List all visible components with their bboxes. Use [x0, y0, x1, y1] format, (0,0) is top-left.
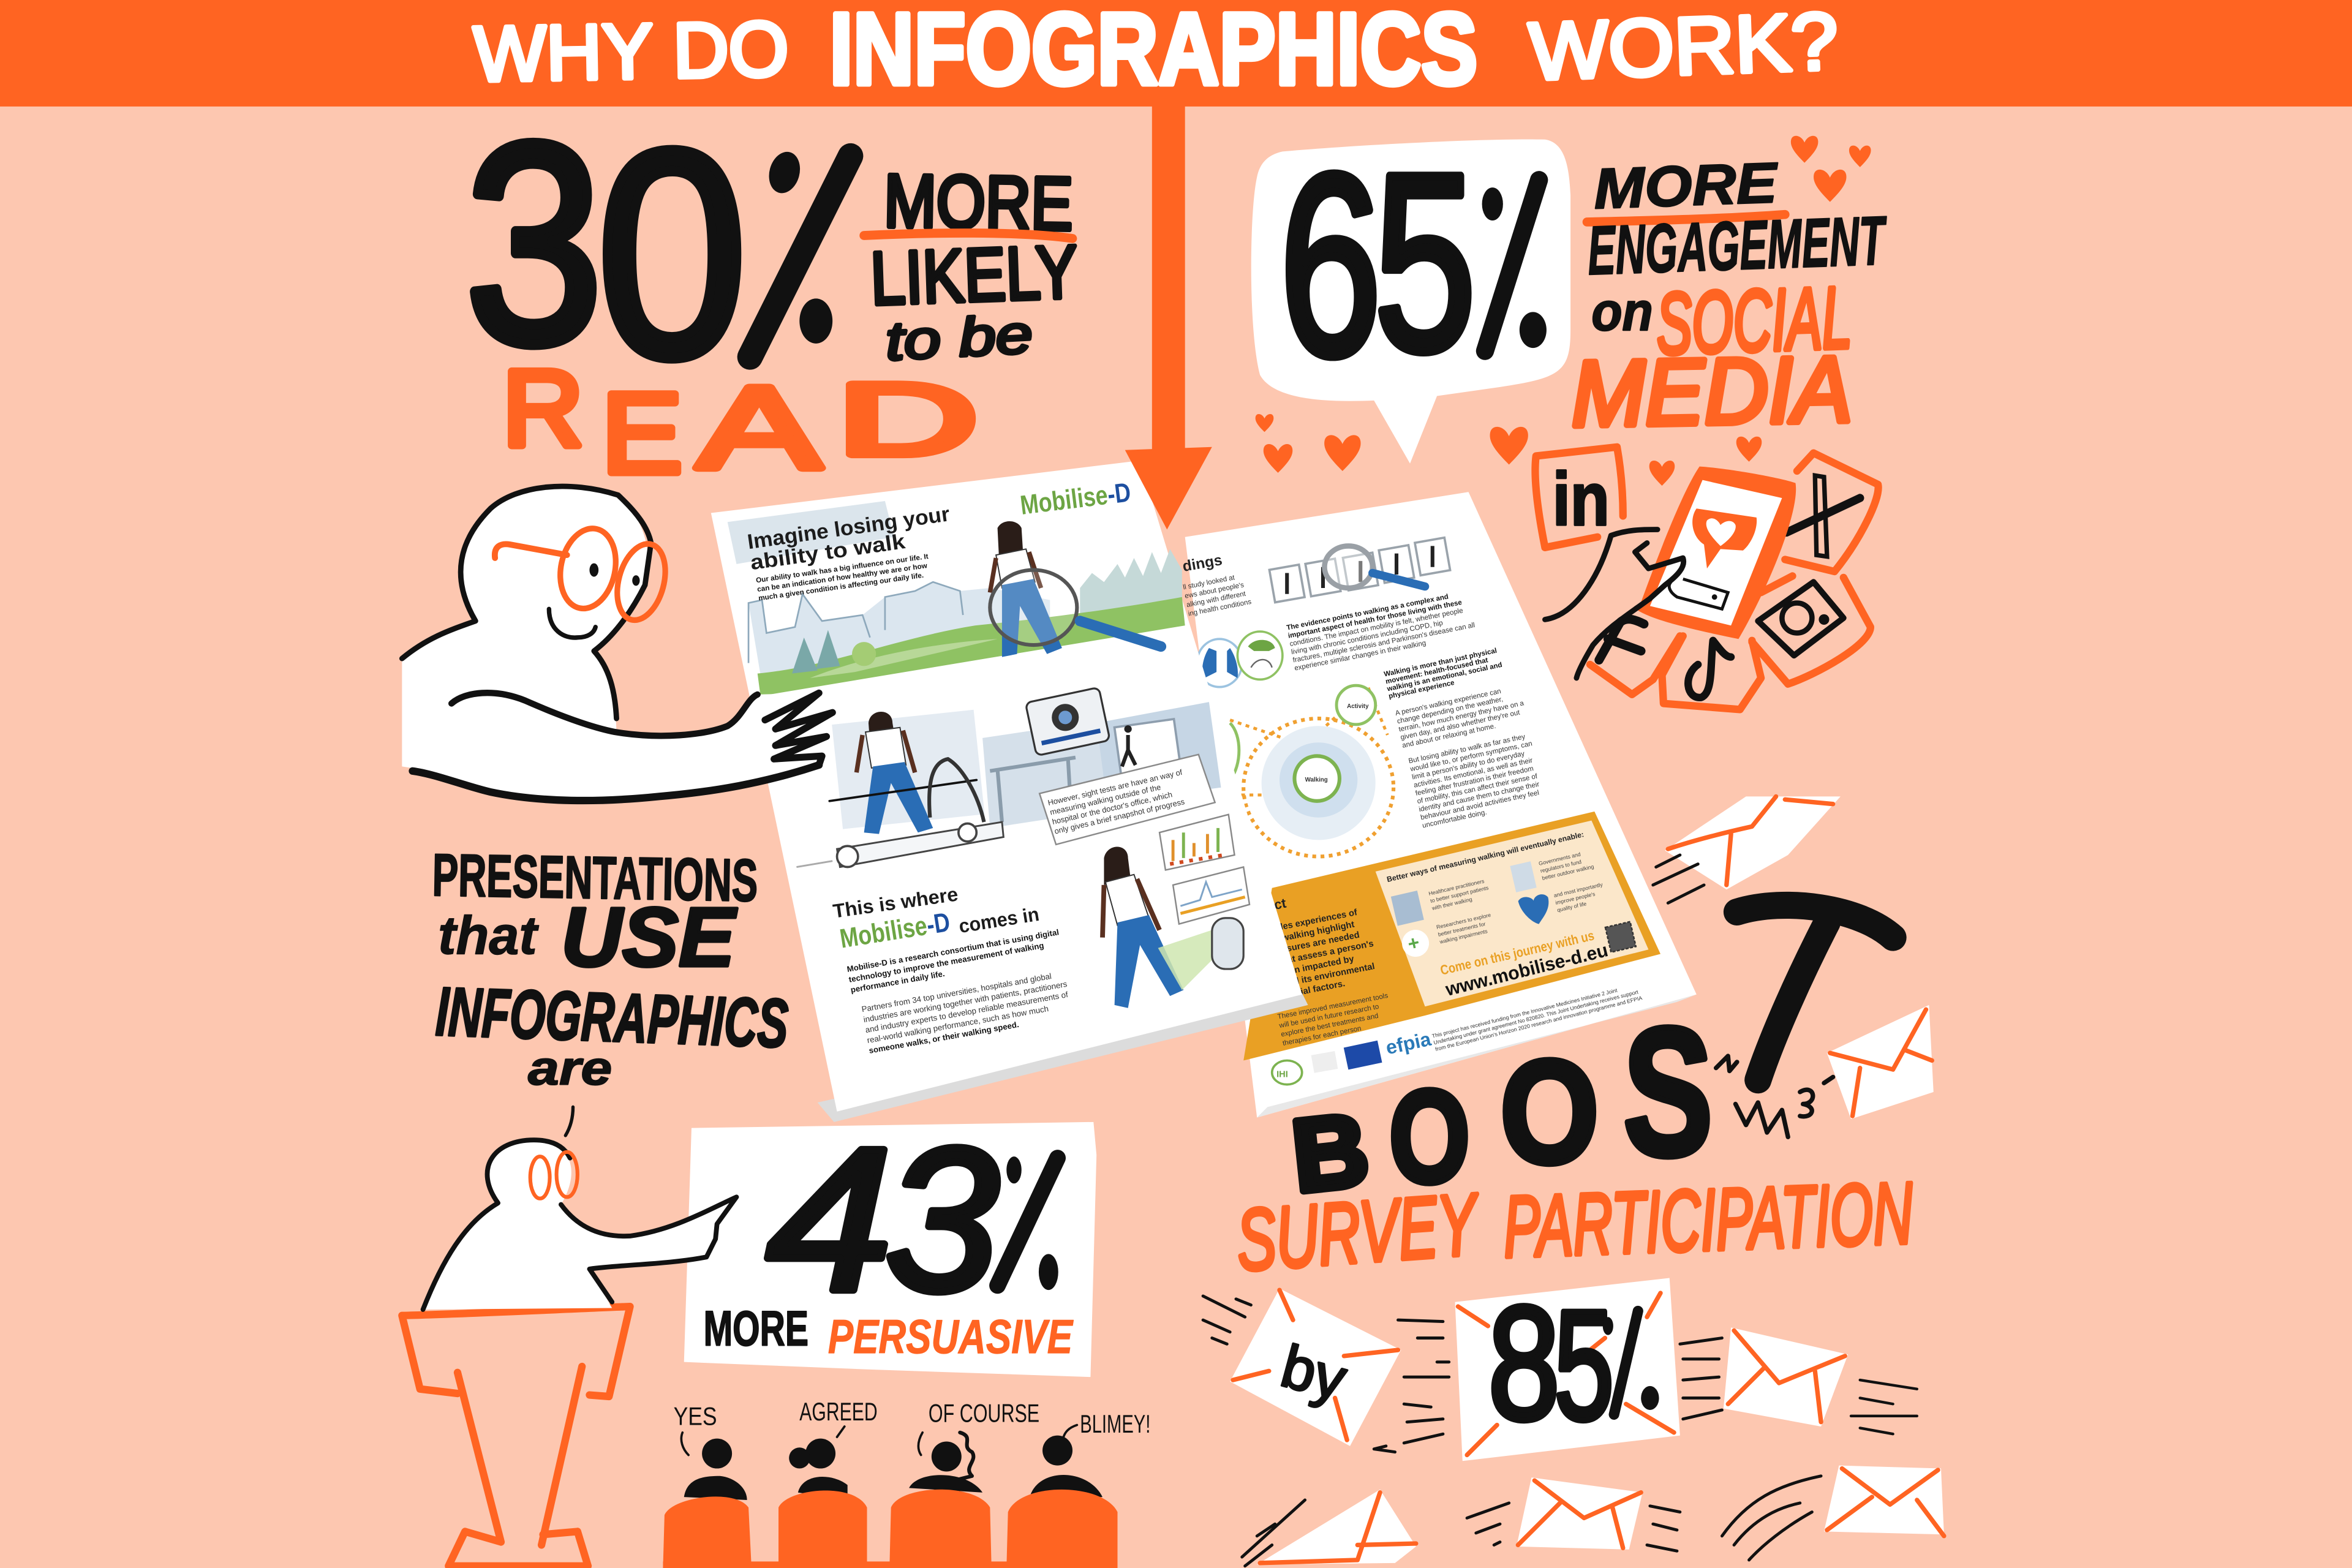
text: more engagement: MORE [1593, 151, 1780, 221]
envelope: bottom right [1722, 1466, 1944, 1560]
funder logos: Undertaking under grant agreement No 820820. This Joint Undertaking receives support [1433, 989, 1639, 1046]
text: walking paragraphs: given day, and also whether they're out [1400, 709, 1521, 742]
text: more likely to be: MORE [883, 159, 1074, 246]
stat: 30%: 3 [465, 84, 603, 402]
callout: sight tests: hospital or the doctor's office, which [1051, 790, 1173, 826]
text: better ways: quality of life [1556, 900, 1587, 913]
text: better ways: walking impairments [1439, 928, 1488, 945]
envelope: 85%: 8 [1488, 1273, 1560, 1454]
text: about Mobilise-D: technology to improve the measurement of walking [848, 941, 1044, 984]
stat: 43% [766, 1105, 1058, 1333]
chart: bar gauges [1159, 815, 1235, 870]
text: read: R [502, 348, 584, 469]
text: about Mobilise-D: someone walks, or their walking speed. [868, 1020, 1020, 1055]
text: this is where: comes in [957, 903, 1041, 937]
text: impact: ct [1273, 895, 1288, 913]
text: read [502, 348, 978, 497]
icon: LinkedIn [1535, 447, 1623, 548]
text: more persuasive: PERSUASIVE [828, 1310, 1074, 1363]
diagram: dotted walking experience circle: Activity [1347, 703, 1369, 710]
text: website: www.mobilise-d.eu [1443, 940, 1610, 1000]
text: this is where: Mobilise-D [838, 907, 952, 954]
text: page title: much a given condition is affecting our daily life. [758, 571, 924, 602]
diagram: dotted walking experience circle [1230, 685, 1393, 856]
chart: line graph [1173, 867, 1250, 924]
panel: audience [663, 1397, 1150, 1568]
panel: 43% more persuasive [684, 1105, 1096, 1377]
panel: 65% more engagement on social media [1251, 121, 1889, 709]
text: impact: e walking highlight [1274, 920, 1355, 945]
text: more likely to be: LIKELY [869, 229, 1079, 320]
text: walking paragraphs: change depending on the weather, [1396, 696, 1504, 725]
text: walking paragraphs [1383, 644, 1545, 831]
envelope: bottom centre [1467, 1477, 1680, 1551]
envelope: by: by [1275, 1332, 1354, 1413]
text: evidence paragraph: fractures, multiple sclerosis and Parkinson's disease can all [1292, 622, 1476, 664]
title: WHY DO [473, 5, 790, 97]
person: blimey [1006, 1436, 1117, 1567]
envelope: top [1653, 796, 1841, 903]
icon: Instagram [1752, 576, 1871, 684]
audience labels: OF COURSE [929, 1399, 1039, 1428]
illustration: presenter [423, 1140, 736, 1310]
text: findings intro: ews about people's [1184, 581, 1245, 600]
panel: 30% more likely to be read [465, 84, 1079, 497]
text: walking paragraphs: walking is an emotional, social and [1386, 662, 1503, 693]
text: walking paragraphs: movement: health-focused that [1385, 657, 1489, 685]
speech bubble: 65%: 5 [1374, 123, 1476, 404]
envelope: by [1203, 1289, 1401, 1446]
text: survey participation: PARTICIPATION [1502, 1164, 1915, 1276]
text: page title: ability to walk [749, 530, 907, 575]
icon: lectern [402, 1306, 630, 1566]
text: better ways: with their walking [1431, 896, 1473, 911]
text: presentations: PRESENTATIONS [432, 841, 758, 914]
text: page title: can be an indication of how healthy we are or how [756, 562, 928, 594]
text: impact: easures are needed [1276, 930, 1360, 956]
text: boost [1287, 905, 1893, 1213]
text: about Mobilise-D [846, 927, 1074, 1057]
text: findings intro [1183, 572, 1252, 618]
envelope: 85%: 5 [1554, 1278, 1614, 1452]
text: social media: MEDIA [1570, 338, 1853, 447]
envelope: right [1827, 1005, 1934, 1119]
text: evidence paragraph: experience similar changes in their walking [1294, 639, 1427, 673]
text: impact: social factors. [1284, 979, 1346, 1000]
text: better ways: + [1406, 931, 1422, 955]
audience labels [674, 1397, 1150, 1455]
diagram: dotted walking experience circle: Walking [1305, 777, 1328, 783]
panel: boost survey participation [1203, 796, 1944, 1566]
text: impact: explore the best treatments and [1280, 1012, 1379, 1039]
text: better ways: to better support patients [1430, 884, 1490, 904]
text: about Mobilise-D: industries are working together with patients, practitioners [863, 979, 1068, 1024]
strip of walking figures [1269, 538, 1450, 602]
text: that use [438, 891, 737, 984]
text: walking paragraphs: A person's walking experience can [1395, 688, 1502, 717]
text: infographics are: are [528, 1041, 612, 1095]
speech bubble: 65% [1251, 121, 1570, 464]
text: infographics are: INFOGRAPHICS [434, 973, 790, 1062]
stat: 43%: 3 [885, 1105, 1000, 1333]
envelope: bottom left [1242, 1490, 1416, 1566]
person: of course [889, 1433, 992, 1567]
text: better ways: Researchers to explore [1436, 912, 1491, 930]
audience labels: YES [674, 1402, 717, 1431]
icon: QR code [1605, 922, 1636, 952]
text: evidence paragraph [1286, 589, 1477, 673]
squiggles [1716, 1056, 1833, 1137]
panel: orange impact box [1243, 812, 1660, 1060]
text: walking paragraphs: But losing ability to walk as far as they [1408, 733, 1526, 765]
icon: hand fingers [765, 693, 832, 765]
text: evidence paragraph: The evidence points to walking as a complex and [1286, 593, 1449, 632]
icon: LinkedIn: in [1553, 457, 1610, 541]
speed lines [1374, 1320, 1449, 1452]
character: woman with sensor [1102, 846, 1243, 1008]
hearts [1256, 136, 1871, 486]
text: impact: will be used in future research to [1278, 1003, 1379, 1030]
scene: skyline and hills [728, 501, 1185, 696]
envelope: 85% [1455, 1273, 1680, 1461]
text: better ways: Healthcare practitioners [1428, 878, 1485, 897]
text: evidence paragraph: living with chronic conditions including COPD, hip [1291, 619, 1444, 656]
text: walking paragraphs: of mobility, this can affect their sense of [1417, 772, 1539, 805]
text: this is where: This is where [832, 883, 959, 922]
text: better ways: Better ways of measuring walking will eventually enable: [1386, 830, 1585, 884]
text: survey participation: SURVEY [1234, 1175, 1483, 1289]
text: that use: that [438, 905, 539, 966]
text: this is where [832, 883, 1041, 954]
logo: Mobilise-D: Mobilise-D [1019, 477, 1133, 521]
text: more engagement: on [1591, 281, 1653, 342]
funder logos: IHI [1276, 1069, 1288, 1079]
document: right page [1182, 492, 1697, 1117]
text: findings intro: alking with different [1186, 590, 1247, 609]
text: survey participation [1234, 1164, 1915, 1289]
scene: treadmill room [796, 702, 1221, 867]
text: walking paragraphs: terrain, how much energy they have on a [1398, 699, 1525, 733]
text: about Mobilise-D: and industry experts to develop reliable measurements of [865, 990, 1069, 1035]
text: more persuasive [704, 1302, 1074, 1363]
text: walking paragraphs: activities. Its emotional, as well as their [1413, 757, 1534, 790]
audience labels: AGREED [799, 1397, 878, 1426]
text: impact: iples experiences of [1272, 908, 1358, 933]
text: about Mobilise-D: real-world walking performance, such as how much [866, 1004, 1049, 1045]
text: social media [1570, 269, 1853, 447]
callout: sight tests [1039, 755, 1215, 845]
text: walking paragraphs: feeling after frustration is their freedom [1415, 765, 1534, 797]
magnifying glass small [1324, 546, 1425, 588]
text: impact [1254, 880, 1394, 1047]
illustration: person with glasses reaching [402, 486, 832, 801]
panel: presentations that use infographics [402, 841, 790, 1566]
text: evidence paragraph: conditions. The impact on mobility is felt, whether people [1289, 607, 1464, 648]
envelope: right middle [1724, 1327, 1917, 1434]
text: boost: O [1500, 1030, 1599, 1194]
text: more engagement [1586, 151, 1889, 342]
text: journey call to action: Come on this journey with us [1439, 928, 1596, 978]
stat: 30% [465, 84, 851, 418]
icon: Facebook [1590, 619, 1680, 695]
character: woman with magnifying glass [990, 521, 1161, 657]
text: findings heading: dings [1182, 552, 1224, 575]
speed lines [1680, 1338, 1722, 1419]
arrow: header to documents [1125, 105, 1212, 529]
text: better ways: improve people's [1555, 891, 1596, 906]
text: read: A [698, 363, 821, 493]
text: page title [746, 502, 958, 603]
icon: lungs and head circles [1197, 631, 1283, 687]
funder logos: efpia [1384, 1028, 1433, 1058]
callout: sight tests: However, sight tests are have an way of [1047, 767, 1183, 807]
text: impact: that assess a person's [1278, 939, 1374, 967]
text: findings intro: ll study looked at [1183, 574, 1236, 591]
text: walking paragraphs: and about or relaxing at home. [1401, 723, 1496, 750]
text: impact: These improved measurement tools [1277, 992, 1389, 1021]
text: page title: Imagine losing your [746, 502, 951, 554]
text: impact: and its environmental [1283, 962, 1376, 989]
text: more likely to be: to be [884, 303, 1034, 372]
icon: phone with heart [1545, 467, 1796, 678]
text: infographics are [434, 973, 790, 1095]
person: agreed [778, 1439, 867, 1567]
header banner [0, 0, 2352, 107]
speech bubble: 65%: 6 [1280, 121, 1382, 409]
text: walking paragraphs: Walking is more than just physical [1384, 647, 1498, 678]
text: that use: USE [561, 891, 737, 984]
text: page title: Our ability to walk has a big influence on our life. It [755, 552, 929, 584]
text: walking paragraphs: identity and cause them to change their [1418, 781, 1540, 813]
text: better ways: better outdoor walking [1542, 864, 1594, 881]
glasses [495, 523, 673, 625]
text: better ways: and most importantly [1553, 881, 1604, 899]
text: better ways [1386, 828, 1610, 959]
text: boost: O [1389, 1063, 1470, 1210]
text: more persuasive: MORE [704, 1302, 809, 1357]
text: about Mobilise-D: Partners from 34 top universities, hospitals and global [861, 971, 1052, 1014]
text: more likely to be [864, 159, 1079, 372]
text: walking paragraphs: limit a person's ability to do everyday [1411, 750, 1525, 781]
document: left page [711, 461, 1308, 1122]
text: about Mobilise-D: Mobilise-D is a research consortium that is using digital [846, 927, 1060, 974]
funder logos [1272, 982, 1643, 1085]
text: walking paragraphs: physical experience [1388, 679, 1455, 700]
text: social media: SOCIAL [1655, 269, 1853, 373]
title [473, 0, 1839, 106]
person: yes [663, 1439, 752, 1567]
text: walking paragraphs: behaviour and avoid activities they feel [1420, 790, 1540, 821]
text: boost: B [1287, 1092, 1374, 1213]
funder logos: This project has received funding from the Innovative Medicines Initiative 2 Joint [1431, 987, 1618, 1039]
icon: TikTok [1662, 636, 1761, 709]
text: better ways: Governments and [1538, 851, 1581, 867]
icon: X [1785, 453, 1879, 571]
stat: 30%: 0 [597, 89, 747, 418]
text: findings intro: ing health conditions [1188, 598, 1252, 618]
text: more engagement: ENGAGEMENT [1586, 202, 1889, 289]
text: about Mobilise-D: performance in daily life. [850, 969, 946, 995]
text: better ways: regulators to fund [1540, 859, 1582, 874]
text: impact: than impacted by [1280, 954, 1355, 978]
text: read: E [601, 370, 682, 497]
callout: sight tests: measuring walking outside of the [1049, 782, 1162, 817]
text: read: D [837, 363, 978, 477]
text: walking paragraphs: would like to, or perform symptoms, can [1409, 740, 1533, 774]
funder logos: from the European Union's Horizon 2020 research and innovation programme and EFPIA [1434, 995, 1643, 1052]
text: boost: S [1623, 990, 1713, 1194]
text: evidence paragraph: important aspect of health for those living with these [1287, 599, 1463, 640]
text: impact: therapies for each person [1282, 1025, 1362, 1047]
icon: holding hand [1545, 529, 1684, 678]
text: better ways: better treatments for [1438, 921, 1486, 938]
audience labels: BLIMEY! [1080, 1409, 1150, 1438]
icon: instant camera [1025, 687, 1110, 756]
text: walking paragraphs: uncomfortable doing. [1422, 809, 1488, 830]
stat: 43%: 4 [766, 1105, 892, 1333]
callout: sight tests: only gives a brief snapshot of progress [1054, 797, 1185, 836]
